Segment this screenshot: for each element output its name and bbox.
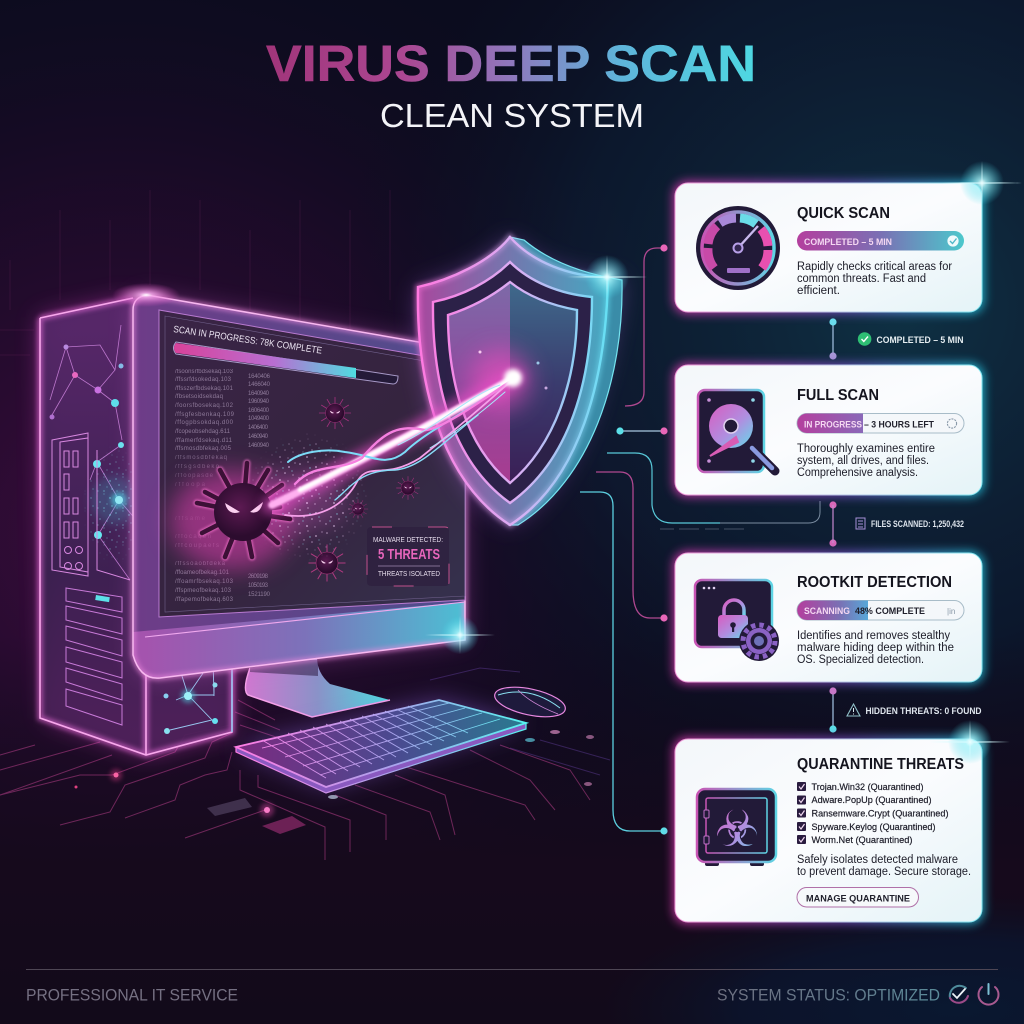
scrolling file list: /foorsfbosekaq.102 (175, 403, 234, 409)
description: Rapidly checks critical areas for (797, 261, 952, 273)
tower io panel (52, 433, 130, 580)
icon: hard drive (698, 390, 775, 472)
scrolling file list: /ffsgsdbeko (175, 464, 220, 470)
desktop computer illustration (40, 295, 465, 755)
small virus bottom (309, 545, 345, 581)
scrolling file list (175, 369, 271, 603)
threat summary panel: MALWARE DETECTED: (373, 535, 443, 544)
keyboard (236, 700, 526, 793)
shield inner left (448, 282, 510, 483)
description: Thoroughly examines entire (797, 443, 935, 455)
small virus right (396, 476, 420, 500)
status pill: IN PROGRESS (804, 420, 862, 430)
status: hidden threats: HIDDEN THREATS: 0 FOUND (866, 706, 982, 717)
scrolling file list: 1466040 (248, 382, 271, 388)
description: OS. Specialized detection. (797, 654, 924, 666)
scrolling file list: /ffoameofbekag.101 (175, 570, 230, 576)
status: files scanned: FILES SCANNED: 1,250,432 (871, 519, 964, 529)
threat summary panel (367, 527, 449, 586)
heading: FULL SCAN (797, 387, 879, 404)
title: virus deep scan: VIRUS DEEP SCAN (266, 35, 756, 92)
subtitle: clean system: CLEAN SYSTEM (380, 97, 644, 134)
scrolling file list: 1049400 (248, 416, 270, 422)
threat summary panel: THREATS ISOLATED (378, 569, 440, 578)
icon: speedometer (696, 206, 780, 290)
tower side network (50, 325, 145, 580)
scrolling file list: /ffssrfdsokedaq.103 (175, 377, 232, 383)
shield 3d side (510, 237, 622, 525)
icon: quarantine safe: ☣ (715, 800, 759, 858)
scrolling file list: 1406400 (248, 425, 269, 431)
scrolling file list: 1460940 (248, 434, 269, 440)
mouse (492, 682, 568, 722)
connector: shield to quick scan (625, 244, 668, 406)
scrolling file list: /ffoopa (175, 482, 206, 488)
quarantine checklist: Ransemware.Crypt (Quarantined) (812, 808, 948, 820)
shield inner right (510, 282, 577, 483)
icon: status check (950, 986, 968, 1003)
scrolling file list: /ffsgfesbenkaq.109 (175, 412, 235, 418)
status: files scanned (829, 501, 964, 547)
quarantine checklist: Adware.PopUp (Quarantined) (812, 795, 932, 806)
card: full scan (673, 363, 984, 497)
footer left label: PROFESSIONAL IT SERVICE (26, 986, 238, 1004)
main virus (197, 463, 290, 557)
threat summary panel: 5 THREATS (378, 546, 440, 563)
scrolling file list: 1640406 (248, 374, 271, 380)
card: rootkit detection (673, 551, 984, 684)
footer system status: SYSTEM STATUS: OPTIMIZED (717, 986, 940, 1004)
small virus mid (348, 499, 368, 519)
scrolling file list: /ffsszerfbdsekaq.101 (175, 386, 234, 392)
scrolling file list: 1960940 (248, 399, 270, 405)
status: completed: COMPLETED – 5 MIN (876, 335, 964, 346)
circuit board traces (0, 668, 610, 860)
circuit chip and nodes (74, 730, 594, 834)
description: Identifies and removes stealthy (797, 630, 950, 642)
description: malware hiding deep within the (797, 642, 954, 654)
scrolling file list: /fcopeobsehdag.611 (175, 429, 231, 435)
scrolling file list: /ffogpbsokdaq.d00 (175, 420, 234, 426)
status: hidden threats (829, 687, 982, 733)
scrolling file list: 1640940 (248, 391, 270, 397)
heading: ROOTKIT DETECTION (797, 574, 952, 591)
footer (26, 970, 999, 1005)
tower pc case (40, 298, 232, 755)
quarantine checklist: Trojan.Win32 (Quarantined) (812, 782, 924, 793)
status pill: SCANNING (804, 606, 850, 617)
card: quarantine threats (673, 737, 984, 924)
status pill (797, 600, 964, 620)
button: manage quarantine (797, 888, 918, 907)
scan status text: SCAN IN PROGRESS: 78K COMPLETE (173, 324, 323, 357)
heading: QUARANTINE THREATS (797, 756, 964, 773)
quarantine checklist (797, 782, 948, 846)
base network (164, 654, 218, 734)
scrolling file list: /ffcoupaefs (175, 543, 219, 549)
shield outlines (418, 237, 608, 525)
heading: QUICK SCAN (797, 205, 890, 222)
scrolling file list: /ffssoaobfdeka (175, 561, 226, 567)
scan beam (272, 350, 548, 516)
scrolling file list: /ffsmosdbfekaq.005 (175, 446, 232, 452)
description: system, all drives, and files. (797, 455, 929, 467)
scrolling file list: /ffamerfdsekaq.d11 (175, 438, 233, 444)
scrolling file list: /ffoamrfbsekaq.103 (175, 579, 234, 585)
scrolling file list: 2609198 (248, 574, 269, 580)
icon: quarantine safe (697, 789, 776, 866)
scrolling file list: 1050193 (248, 583, 269, 589)
shield dark ring (433, 262, 592, 503)
scrolling file list: /ffsame (175, 516, 206, 522)
shield outer band (418, 237, 608, 525)
description: Safely isolates detected malware (797, 854, 958, 866)
monitor screen (159, 310, 465, 617)
status: completed (829, 318, 964, 360)
shield (418, 237, 622, 525)
description: Comprehensive analysis. (797, 467, 918, 479)
scan progress bar (174, 342, 398, 384)
status pill: 48% COMPLETE (855, 606, 925, 617)
status pill: COMPLETED – 5 MIN (804, 237, 892, 248)
description: common threats. Fast and (797, 273, 926, 285)
description (797, 854, 971, 878)
glow flares (112, 161, 1022, 764)
connector: shield to rootkit detection (596, 472, 668, 622)
scrolling file list: /ffspmeofbekaq.103 (175, 588, 232, 594)
card: quick scan (673, 181, 984, 314)
scrolling file list: /ffocaqen (175, 534, 211, 540)
monitor stand (245, 655, 390, 717)
tower drive bays (66, 588, 122, 725)
description (797, 443, 935, 479)
scrolling file list: /ffapemofbekaq.603 (175, 597, 234, 603)
scrolling file list: /fsoonsrfbdsekaq.103 (175, 369, 234, 375)
description: to prevent damage. Secure storage. (797, 866, 971, 878)
small virus top (319, 397, 351, 429)
scrolling file list: 1521190 (248, 592, 271, 598)
scrolling file list: /ffoopasde (175, 473, 214, 479)
description: efficient. (797, 285, 840, 297)
scrolling file list: /fbsetsoidsekdaq (175, 394, 223, 400)
title (266, 35, 756, 134)
connector: shield to quarantine (580, 492, 668, 835)
status pill: – 3 HOURS LEFT (864, 420, 934, 430)
description (797, 630, 954, 666)
connector: shield to full scan (616, 427, 668, 435)
scrolling file list: 1606400 (248, 408, 270, 414)
status pill (797, 231, 964, 250)
icon: browser lock and gear (695, 580, 779, 661)
icon: power (979, 984, 999, 1005)
scrolling file list: /ffsmosdbfekaq (175, 455, 227, 461)
status pill (797, 414, 964, 433)
button: manage quarantine: MANAGE QUARANTINE (806, 894, 910, 904)
quarantine checklist: Spyware.Keylog (Quarantined) (812, 822, 936, 833)
description (797, 261, 952, 297)
connector: shield to files scanned (607, 453, 820, 529)
scrolling file list: 1460940 (248, 443, 270, 449)
status pill: |in (947, 607, 955, 616)
monitor body (133, 295, 465, 678)
particles (170, 431, 370, 570)
quarantine checklist: Worm.Net (Quarantined) (812, 835, 912, 846)
